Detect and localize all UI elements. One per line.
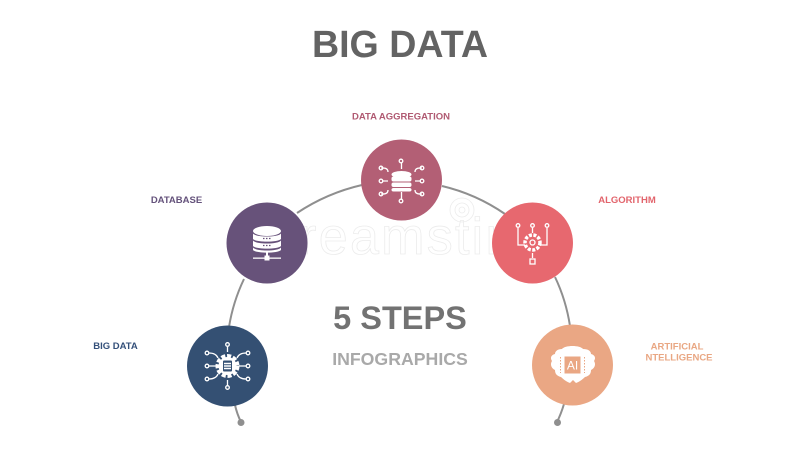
label: artificial intelligence: NTELLIGENCE xyxy=(645,352,713,364)
label: artificial intelligence: ARTIFICIAL xyxy=(651,342,704,352)
start dot xyxy=(238,419,244,426)
step 5: artificial intelligence xyxy=(532,324,713,406)
label: big data: BIG DATA xyxy=(93,341,138,352)
icon text: AI: AI xyxy=(567,358,578,372)
label: data aggregation: DATA AGGREGATION xyxy=(352,112,450,122)
connecting arc xyxy=(229,185,570,422)
label: database: DATABASE xyxy=(151,195,202,206)
center heading: 5 steps: 5 STEPS xyxy=(333,300,467,336)
step 1: big data xyxy=(93,326,268,406)
title: BIG DATA xyxy=(312,23,488,65)
step 2: database xyxy=(151,195,308,284)
icon: gear with flow lines xyxy=(516,224,549,264)
icon: gear with circuit nodes xyxy=(205,343,250,389)
center subheading: infographics: INFOGRAPHICS xyxy=(332,349,468,369)
circle: big data xyxy=(187,326,268,406)
circle: algorithm xyxy=(492,202,573,284)
circle: artificial intelligence xyxy=(532,324,613,406)
watermark: dreamstime xyxy=(268,208,560,266)
icon: database server on network xyxy=(253,226,281,260)
icon: AI brain chip xyxy=(551,346,595,383)
label: algorithm: ALGORITHM xyxy=(598,195,656,206)
step 3: data aggregation xyxy=(352,112,450,220)
end dot xyxy=(554,419,561,426)
icon: database with circuit nodes xyxy=(379,159,424,203)
step 4: algorithm xyxy=(492,195,656,284)
circle: database xyxy=(226,202,308,284)
circle: data aggregation xyxy=(361,140,442,220)
